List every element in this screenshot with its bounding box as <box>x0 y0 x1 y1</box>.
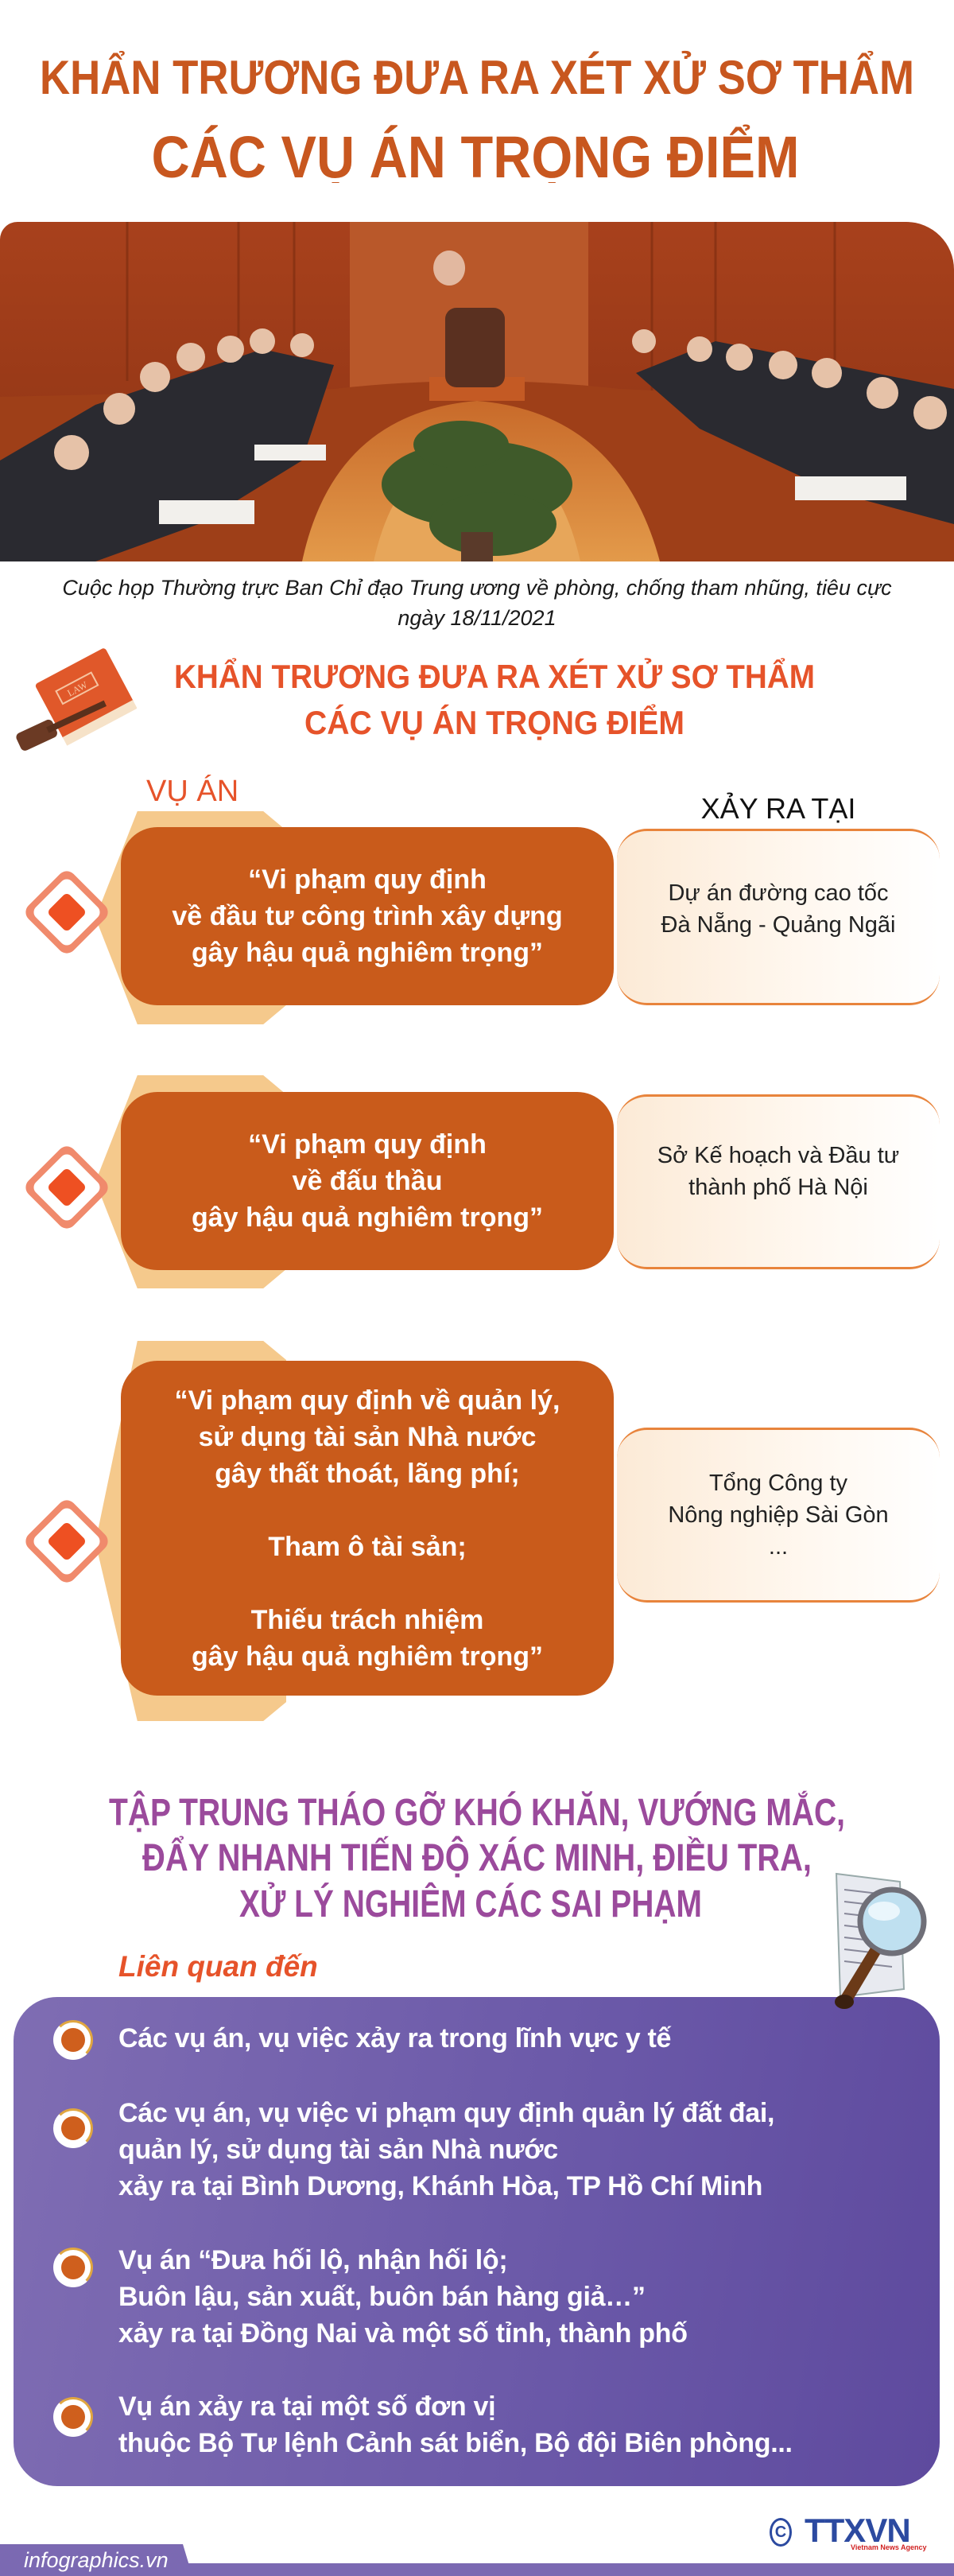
bullet item 3: Buôn lậu, sản xuất, buôn bán hàng giả…” <box>118 2282 646 2312</box>
icon: law book and gavel: LAW <box>65 678 90 699</box>
bullet item 2: quản lý, sử dụng tài sản Nhà nước <box>118 2135 558 2165</box>
bullet item 3: Vụ án “Đưa hối lộ, nhận hối lộ; <box>118 2245 507 2275</box>
panel: related cases <box>14 1997 940 2486</box>
case 1 location: Dự án đường cao tốc <box>668 880 889 906</box>
case 3 text: Thiếu trách nhiệm <box>251 1605 483 1635</box>
bullet item 4 <box>53 2391 793 2458</box>
section heading: trials: KHẨN TRƯƠNG ĐƯA RA XÉT XỬ SƠ THẨM <box>174 657 815 695</box>
icon: diamond 2 <box>25 1146 108 1229</box>
case 1 text: về đầu tư công trình xây dựng <box>172 901 563 931</box>
logo: TTXVN <box>770 2512 927 2551</box>
photo: meeting <box>0 222 954 561</box>
bullet item 4: thuộc Bộ Tư lệnh Cảnh sát biển, Bộ đội Biên phòng... <box>118 2428 793 2458</box>
icon: diamond 1 <box>25 871 108 954</box>
case 3 text: Tham ô tài sản; <box>268 1532 467 1562</box>
photo caption: ngày 18/11/2021 <box>398 606 556 630</box>
case 1 <box>25 811 940 1024</box>
section heading: trials: CÁC VỤ ÁN TRỌNG ĐIỂM <box>304 703 684 741</box>
bullet item 4: Vụ án xảy ra tại một số đơn vị <box>118 2391 495 2422</box>
footer: infographics.vn: infographics.vn <box>24 2548 169 2572</box>
column header: vụ án: VỤ ÁN <box>146 775 238 808</box>
case 3 text: gây thất thoát, lãng phí; <box>215 1459 520 1489</box>
case 2 text: gây hậu quả nghiêm trọng” <box>192 1203 543 1233</box>
case 1 text: “Vi phạm quy định <box>248 864 487 895</box>
case 3 location: Tổng Công ty <box>709 1471 847 1496</box>
case 2 text: “Vi phạm quy định <box>248 1129 487 1160</box>
section heading: investigation: XỬ LÝ NGHIÊM CÁC SAI PHẠM <box>239 1882 702 1925</box>
icon: document magnifier <box>835 1872 927 2009</box>
bullet item 2: xảy ra tại Bình Dương, Khánh Hòa, TP Hồ Chí Minh <box>118 2171 762 2201</box>
photo caption: Cuộc họp Thường trực Ban Chỉ đạo Trung ương về phòng, chống tham nhũng, tiêu cực <box>62 576 892 600</box>
section heading: investigation <box>109 1790 845 1925</box>
case 1 location: Đà Nẵng - Quảng Ngãi <box>661 912 895 938</box>
bullet item 1 <box>53 2020 671 2060</box>
bullet item 3: xảy ra tại Đồng Nai và một số tỉnh, thành phố <box>118 2318 688 2349</box>
icon: diamond 3 <box>25 1500 108 1583</box>
case 1 text <box>121 827 614 1005</box>
case 3 location: Nông nghiệp Sài Gòn <box>668 1502 889 1528</box>
case 3 location <box>617 1428 940 1603</box>
bullet item 3 <box>53 2245 688 2349</box>
case 3 text: sử dụng tài sản Nhà nước <box>199 1422 536 1452</box>
case 2 text: về đấu thầu <box>293 1166 442 1196</box>
case 1 location <box>617 829 940 1005</box>
case 1 text: gây hậu quả nghiêm trọng” <box>192 938 543 968</box>
case 3 location: ... <box>769 1534 788 1560</box>
case 3 text <box>121 1361 614 1696</box>
subheading: liên quan đến: Liên quan đến <box>118 1950 318 1983</box>
case 2 location: thành phố Hà Nội <box>688 1175 868 1200</box>
case 2 location: Sở Kế hoạch và Đầu tư <box>657 1143 899 1168</box>
case 2 <box>25 1075 940 1288</box>
section heading: investigation: ĐẨY NHANH TIẾN ĐỘ XÁC MINH, ĐIỀU TRA, <box>142 1836 812 1879</box>
case 2 location <box>617 1094 940 1269</box>
case 3 text: gây hậu quả nghiêm trọng” <box>192 1642 543 1672</box>
bullet item 2: Các vụ án, vụ việc vi phạm quy định quản lý đất đai, <box>118 2098 774 2128</box>
case 2 text <box>121 1092 614 1270</box>
bullet item 2 <box>53 2098 774 2201</box>
section heading: trials <box>174 657 815 741</box>
case 3 <box>25 1341 940 1721</box>
case 3 text: “Vi phạm quy định về quản lý, <box>175 1385 560 1416</box>
photo caption <box>62 576 892 630</box>
title <box>40 51 914 183</box>
footer: infographics.vn <box>0 2544 189 2572</box>
icon: law book and gavel <box>16 648 137 751</box>
logo: TTXVN: TTXVN <box>805 2512 910 2549</box>
footer band <box>0 2563 954 2576</box>
logo: TTXVN: C <box>775 2524 786 2541</box>
logo: TTXVN: Vietnam News Agency <box>851 2543 927 2551</box>
column header: xảy ra tại: XẢY RA TẠI <box>701 792 855 825</box>
bullet item 1: Các vụ án, vụ việc xảy ra trong lĩnh vực y tế <box>118 2023 671 2053</box>
